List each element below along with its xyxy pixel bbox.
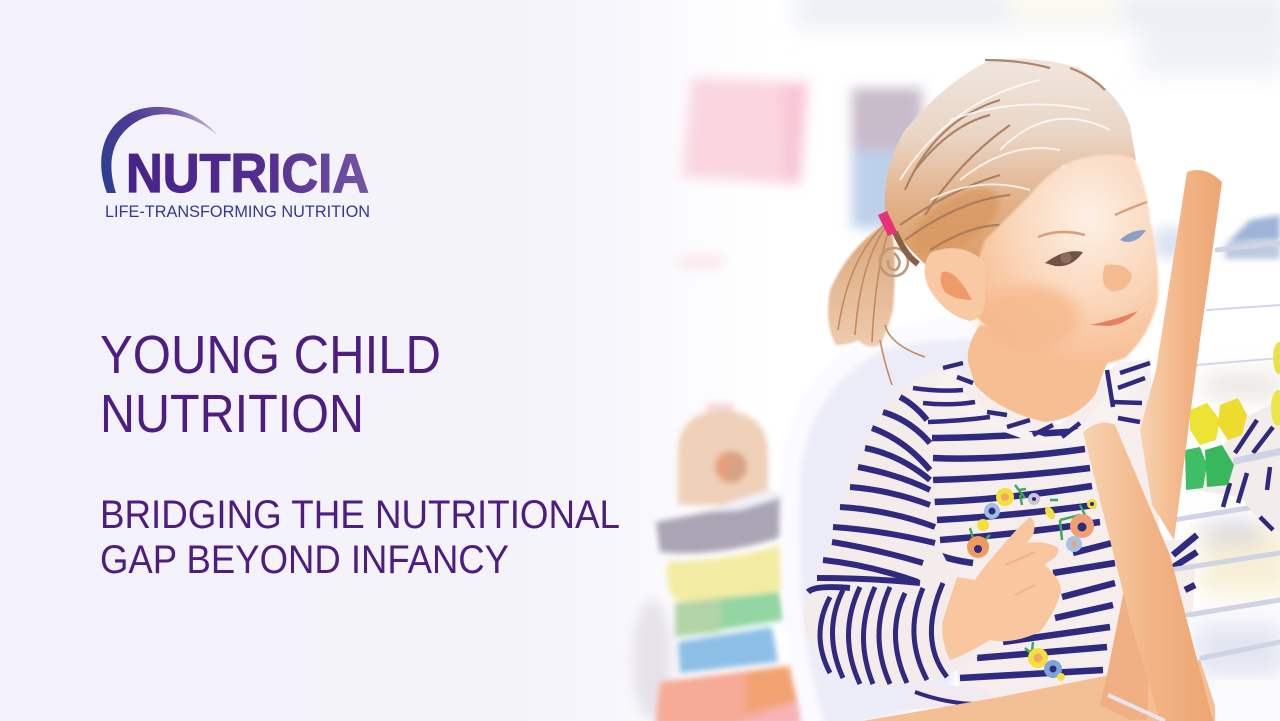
striped top: body [900, 358, 1197, 720]
arm sleeve [804, 385, 978, 686]
bead: yellow left [1190, 403, 1220, 445]
neck [968, 325, 1112, 422]
logo [101, 107, 370, 221]
title: NUTRITION [100, 384, 364, 444]
child [804, 59, 1197, 720]
striped top: collar [913, 360, 1150, 445]
frame: thin lower rod [1108, 695, 1165, 721]
bead: yellow right [1218, 398, 1247, 440]
flower embroidery [967, 485, 1097, 681]
ponytail [828, 224, 925, 385]
frame: front diagonal bar [1083, 423, 1213, 721]
face [924, 154, 1158, 366]
blurred playroom background [632, 0, 1280, 720]
logo wordmark: NUTRICIA [126, 142, 369, 204]
abacus beads [1185, 342, 1280, 490]
white chair back [789, 322, 1000, 721]
wooden table [863, 660, 1280, 721]
bead: yellow edge upper [1273, 342, 1280, 374]
nose [1103, 264, 1132, 292]
hair [878, 59, 1136, 269]
frame: lower leg [1100, 590, 1152, 720]
ponytail curl [880, 248, 908, 276]
subtitle: GAP BEYOND INFANCY [100, 538, 509, 582]
abacus rods [1170, 243, 1280, 658]
title [100, 325, 441, 444]
tower: yellow ring [667, 544, 792, 602]
ear [924, 248, 985, 321]
tower: wooden top piece [678, 403, 768, 505]
toy stacking tower [655, 403, 812, 721]
title: YOUNG CHILD [100, 325, 441, 385]
bead: yellow edge lower [1271, 390, 1280, 426]
frame: rear upright [1140, 170, 1222, 540]
hair tie [878, 211, 897, 236]
bead: green right [1205, 445, 1234, 487]
hair: dark band behind tie [895, 232, 918, 264]
bead: green left [1185, 447, 1207, 490]
hand and forearm [942, 517, 1061, 660]
mouth [1090, 311, 1138, 326]
eyes and brows [1038, 202, 1147, 266]
subtitle [100, 493, 620, 582]
logo tagline: LIFE-TRANSFORMING NUTRITION [105, 202, 370, 221]
tower: gray ring [656, 490, 792, 553]
far arm sleeve with stripes [1195, 400, 1280, 532]
wooden abacus frame [1083, 170, 1222, 721]
tower: green ring [675, 592, 785, 637]
tower: coral ring [655, 665, 812, 721]
tower: blue ring [678, 627, 778, 673]
subtitle: BRIDGING THE NUTRITIONAL [100, 493, 620, 537]
logo arc [101, 107, 217, 193]
